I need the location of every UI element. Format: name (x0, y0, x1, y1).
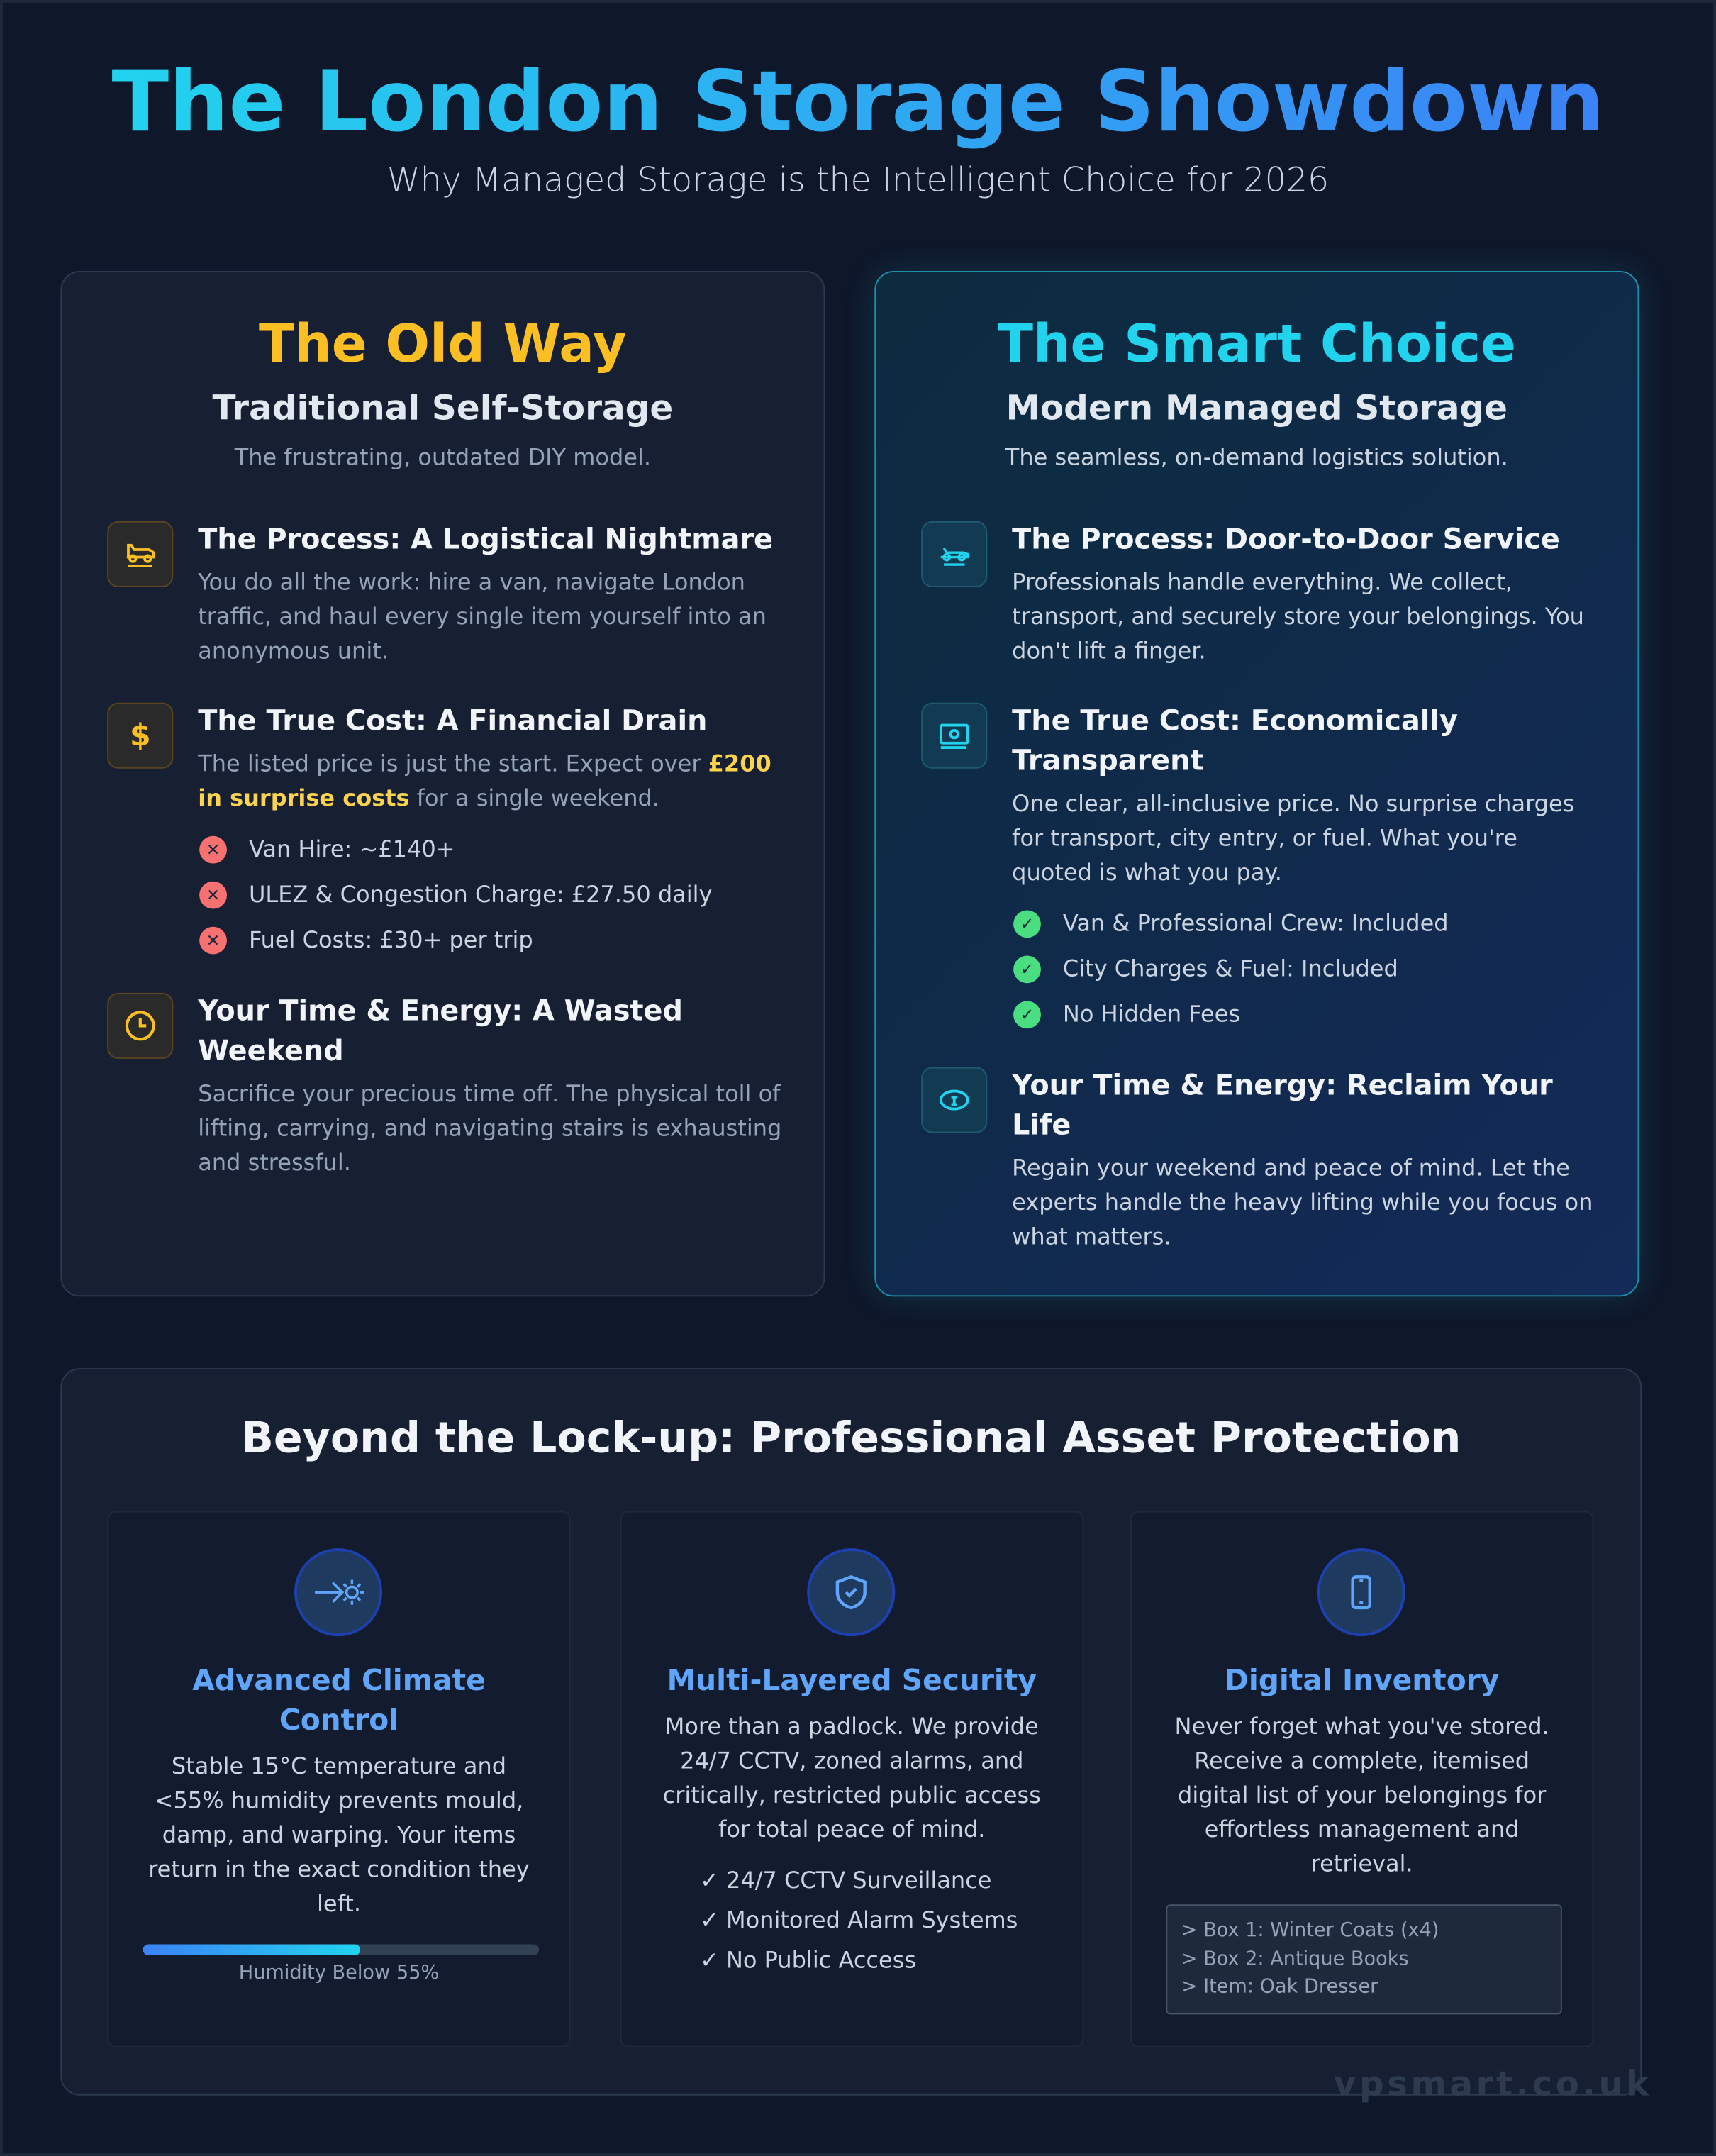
subheading: Modern Managed Storage (1006, 388, 1508, 428)
icon: heart (921, 1067, 987, 1133)
inventory list: > Box 2: Antique Books (1181, 1947, 1409, 1969)
subheading: Traditional Self-Storage (212, 388, 673, 428)
bar label: Humidity Below 55% (239, 1962, 439, 1984)
item: cost: Fuel Costs: £30+ per trip (249, 927, 533, 953)
icon: shield (807, 1548, 895, 1636)
checklist: ✓ Monitored Alarm Systems (700, 1907, 1018, 1933)
item: cost: ✓ (1020, 913, 1034, 933)
item: cost (198, 704, 771, 955)
inventory list: > Item: Oak Dresser (1181, 1976, 1378, 1998)
item: process: You do all the work: hire a van, navigate London traffic, and haul every single item yourself into an anonymous unit. (198, 569, 767, 664)
icon: phone (1317, 1548, 1405, 1636)
panel: old way (60, 271, 825, 1296)
item: cost: Van & Professional Crew: Included (1063, 910, 1449, 936)
card: inventory (1130, 1511, 1593, 2047)
icon: money (107, 703, 173, 769)
heading (192, 1664, 486, 1737)
item: cost: ✕ (206, 930, 220, 950)
item: process (198, 523, 773, 664)
text: Stable 15°C temperature and <55% humidity prevents mould, damp, and warping. Your items return in the exact condition they left. (148, 1753, 530, 1917)
heading: Beyond the Lock-up: Professional Asset Protection (241, 1413, 1461, 1463)
item: time: Your Time & Energy: Reclaim Your Life (1012, 1068, 1553, 1141)
item: time: Regain your weekend and peace of mind. Let the experts handle the heavy lifting while you focus on what matters. (1012, 1155, 1593, 1250)
item: cost: ✓ (1020, 959, 1034, 978)
icon: climate (294, 1548, 382, 1636)
item: time: Sacrifice your precious time off. The physical toll of lifting, carrying, and navigating stairs is exhausting and stressful. (198, 1081, 781, 1176)
panel: asset protection (60, 1368, 1642, 2096)
tagline: The seamless, on-demand logistics solution. (1005, 444, 1508, 470)
title: The London Storage Showdown (111, 54, 1605, 151)
card: security (620, 1511, 1083, 2047)
text: More than a padlock. We provide 24/7 CCTV, zoned alarms, and critically, restricted public access for total peace of mind. (663, 1713, 1041, 1843)
item: cost: The listed price is just the start. Expect over £200 in surprise costs for a single weekend. (198, 751, 771, 811)
text: Never forget what you've stored. Receive a complete, itemised digital list of your belongings for effortless management and retrieval. (1175, 1713, 1549, 1877)
icon: money: $ (130, 718, 151, 752)
item: time (1011, 1068, 1593, 1250)
item: cost: ULEZ & Congestion Charge: £27.50 daily (249, 882, 712, 908)
humidity bar (143, 1944, 539, 1955)
icon: car (921, 521, 987, 587)
heading: Advanced Climate (192, 1664, 486, 1696)
item: cost: City Charges & Fuel: Included (1063, 955, 1398, 982)
item: cost: The True Cost: Economically Transparent (1012, 704, 1458, 777)
item: cost: ✕ (206, 885, 220, 904)
item: process: The Process: Door-to-Door Service (1012, 523, 1560, 555)
item: time: Your Time & Energy: A Wasted Weekend (198, 994, 683, 1067)
icon: van (107, 521, 173, 587)
heading: Control (279, 1704, 399, 1737)
heading: old way: The Old Way (259, 313, 627, 374)
heading: smart choice: The Smart Choice (998, 313, 1516, 374)
icon: banknote (921, 703, 987, 769)
inventory list (1166, 1904, 1562, 2014)
tagline: The frustrating, outdated DIY model. (235, 444, 651, 470)
subtitle: Why Managed Storage is the Intelligent Choice for 2026 (387, 160, 1329, 199)
card: climate (107, 1511, 571, 2047)
item: cost: The True Cost: A Financial Drain (198, 704, 707, 737)
panel: smart choice (874, 271, 1639, 1296)
item: time (197, 994, 781, 1176)
item: cost (1012, 704, 1574, 1028)
item: cost: ✓ (1020, 1004, 1034, 1023)
item: process (1012, 523, 1584, 664)
checklist (700, 1867, 1018, 1973)
item: process: The Process: A Logistical Nightmare (198, 523, 773, 555)
item: cost: No Hidden Fees (1063, 1001, 1240, 1027)
item: process: Professionals handle everything. We collect, transport, and securely store your belongings. You don't lift a finger. (1012, 569, 1584, 664)
heading: Digital Inventory (1225, 1664, 1499, 1696)
checklist: ✓ No Public Access (700, 1947, 916, 1973)
checklist: ✓ 24/7 CCTV Surveillance (700, 1867, 991, 1894)
item: cost: One clear, all-inclusive price. No surprise charges for transport, city entry, or fuel. What you're quoted is what you pay. (1012, 791, 1574, 886)
item: cost: ✕ (206, 840, 220, 859)
heading: Multi-Layered Security (667, 1664, 1037, 1696)
icon: clock (107, 993, 173, 1059)
inventory list: > Box 1: Winter Coats (x4) (1181, 1920, 1439, 1942)
item: cost: Van Hire: ~£140+ (249, 836, 455, 862)
watermark: vpsmart.co.uk (1334, 2064, 1652, 2104)
